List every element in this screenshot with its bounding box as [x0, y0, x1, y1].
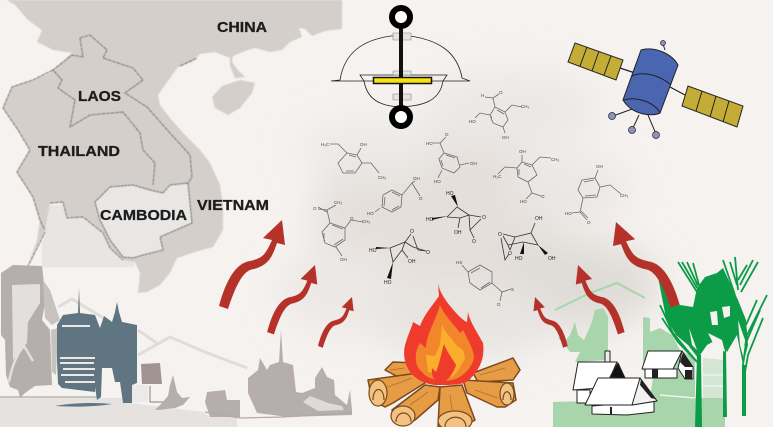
- chamber bowl: [360, 75, 447, 107]
- yellow filter: [374, 78, 432, 84]
- log: front middle: [438, 385, 475, 427]
- right emission arrows: [533, 222, 680, 348]
- right grey towers: [248, 330, 352, 417]
- molecule: levoglucosan lower left: HO: [369, 248, 377, 254]
- central rod: [399, 25, 403, 110]
- dark factory building: [57, 288, 137, 403]
- flux chamber sampler: [331, 8, 470, 126]
- mountain outline: [58, 299, 247, 368]
- molecule: dimethoxyphenol: H₃C: [321, 142, 330, 147]
- molecule: syringaldehyde: O: [499, 90, 503, 95]
- arrow: small right: [533, 297, 568, 348]
- molecule: syringic acid: H₃C: [493, 174, 502, 179]
- molecule: syringaldehyde: OH: [502, 135, 509, 140]
- molecule: syringic acid: CH₃: [551, 157, 559, 162]
- molecule: levoglucosan lower left: [369, 229, 430, 286]
- antenna stalks: [613, 44, 665, 134]
- molecule: levoglucosan lower right: O: [508, 251, 512, 257]
- satellite body: [623, 49, 678, 115]
- low grey building: [205, 390, 240, 417]
- map: land mass: [3, 0, 342, 293]
- tower side strip: [51, 328, 58, 375]
- molecule: levoglucosan lower right: OH: [535, 216, 543, 222]
- molecule: acetovanillone: OH: [340, 257, 347, 262]
- log end rings: [369, 380, 514, 427]
- molecule: acetovanillone: [313, 200, 370, 262]
- molecule: acetovanillone: CH₃: [334, 200, 342, 205]
- log: lower right: [463, 380, 516, 407]
- smoke haze: [280, 70, 660, 360]
- front house: [592, 401, 654, 415]
- left boom: [620, 68, 635, 73]
- small white block: [132, 385, 148, 402]
- right solar panel: [682, 86, 743, 127]
- arrow: large left: [219, 220, 285, 309]
- molecule: syringaldehyde: HO: [469, 119, 476, 124]
- right boom: [670, 87, 685, 95]
- molecule: vanillic acid: HO: [565, 211, 572, 216]
- molecule: levoglucosan lower right: [498, 216, 556, 262]
- tree canopy: [658, 268, 748, 365]
- molecule: levoglucosan lower right: OH: [548, 256, 556, 262]
- satellite: [568, 40, 743, 138]
- body bands: [624, 74, 671, 113]
- ground line: [0, 396, 100, 398]
- molecule: vanillic acid: O: [587, 220, 591, 225]
- bottom ring: [392, 108, 410, 126]
- molecule: syringic acid: OH: [519, 149, 526, 154]
- arrow: small left: [318, 297, 354, 348]
- map label: Cambodia: CAMBODIA: [100, 207, 187, 224]
- arrow: middle left: [267, 265, 317, 334]
- village with green backdrop: [553, 283, 725, 427]
- molecule: bottom benzoate: [456, 260, 514, 307]
- molecule: dimethoxyphenol: CH₃: [378, 175, 386, 180]
- map: country borders: [3, 35, 197, 268]
- small brown building: [141, 363, 162, 384]
- molecule: levoglucosan top: O: [482, 215, 486, 221]
- map label: Vietnam: VIETNAM: [197, 197, 269, 214]
- molecule: levoglucosan lower left: O: [410, 229, 414, 235]
- tree trunks: [695, 350, 746, 427]
- pale ground streaks: [660, 375, 725, 398]
- factory stripes: [60, 326, 95, 382]
- right house: [645, 369, 677, 378]
- logs: [368, 358, 520, 427]
- lower canopy wedges: [689, 320, 745, 360]
- map: Gulf of Thailand: [42, 205, 134, 267]
- molecule: hydroxybenzoic acid: HO: [367, 211, 374, 216]
- green hill: [555, 283, 645, 310]
- molecule: dimethoxyphenol: OH: [360, 142, 367, 147]
- molecule: syringaldehyde: CH₃: [521, 104, 529, 109]
- molecule: levoglucosan top: HO: [446, 191, 454, 197]
- molecule: hydroxybenzoic acid: OH: [413, 176, 420, 181]
- molecule: levoglucosan top: OH: [454, 230, 462, 236]
- molecule: acetovanillone: CH₃: [362, 219, 370, 224]
- tower shoulder: [43, 280, 60, 325]
- map label: Thailand: THAILAND: [38, 143, 120, 160]
- molecule: dimethoxyphenol: [321, 142, 386, 180]
- molecule: syringic acid: HO: [520, 199, 527, 204]
- arrow: large right: [613, 222, 680, 307]
- molecule: dihydroxybenzoic acid: OH: [470, 161, 477, 166]
- arrow: middle right: [576, 265, 625, 334]
- tower curved highlight: [9, 346, 33, 382]
- map label: China: CHINA: [217, 19, 267, 36]
- tree branches: [660, 257, 767, 378]
- left house: [573, 351, 693, 415]
- molecule: levoglucosan lower left: O: [426, 250, 430, 256]
- chamber dome: [331, 35, 470, 81]
- map: Hainan island: [212, 80, 255, 115]
- log: back right: [473, 358, 520, 382]
- molecule: dihydroxybenzoic acid: HO: [434, 179, 441, 184]
- molecule: syringaldehyde: [469, 90, 529, 140]
- molecule: acetovanillone: O: [313, 206, 317, 211]
- molecule: acetovanillone: O: [350, 216, 354, 221]
- factory base shadow: [55, 403, 112, 407]
- green skyline right: [643, 317, 695, 398]
- urban and industrial skyline: [0, 265, 360, 427]
- molecule: hydroxybenzoic acid: O: [419, 196, 423, 201]
- molecule: dihydroxybenzoic acid: HO: [426, 141, 433, 146]
- map label: Laos: LAOS: [78, 88, 121, 105]
- left solar panel: [568, 43, 623, 80]
- molecule: levoglucosan top: HO: [426, 217, 434, 223]
- grey tower group: [1, 265, 56, 398]
- molecule: dihydroxybenzoic acid: O: [445, 132, 449, 137]
- map: Cambodia: [95, 183, 192, 258]
- white canopy gaps: [710, 306, 730, 325]
- molecule: syringic acid: O: [541, 194, 545, 199]
- molecule: levoglucosan top: [426, 191, 486, 245]
- green skyline left: [557, 308, 608, 362]
- log: lower left: [368, 373, 425, 407]
- tower highlight: [12, 284, 40, 360]
- pale skyline fade: [703, 358, 725, 398]
- flame core: [432, 344, 456, 383]
- map: mainland Southeast Asia: [3, 0, 342, 293]
- rising emission arrows: [219, 220, 354, 348]
- molecule: syringic acid: [493, 149, 559, 204]
- molecule: levoglucosan lower right: O: [498, 232, 502, 238]
- molecule: vanillic acid: CH₃: [620, 193, 628, 198]
- molecule: bottom benzoate: HS: [456, 260, 462, 265]
- antenna tips: [608, 40, 666, 138]
- log: front left: [392, 385, 440, 425]
- molecule: levoglucosan lower left: OH: [408, 259, 416, 265]
- molecule: levoglucosan lower left: HO: [384, 280, 392, 286]
- log: back left: [385, 362, 426, 378]
- molecule: hydroxybenzoic acid: [367, 176, 423, 216]
- molecule: levoglucosan top: O: [472, 239, 476, 245]
- flame yellow: [426, 324, 465, 377]
- green trees: [658, 257, 767, 427]
- molecule: vanillic acid: OH: [596, 164, 603, 169]
- white foreground cut-outs: [238, 419, 360, 427]
- campfire: [368, 282, 520, 427]
- ground line right: [205, 412, 352, 418]
- molecule: syringaldehyde: H: [481, 93, 484, 98]
- ground: [0, 398, 237, 427]
- spire rubble: [155, 375, 190, 410]
- green ground: [553, 398, 725, 427]
- block outline: [150, 386, 168, 402]
- clamps: [393, 33, 411, 100]
- flame outer: [404, 282, 483, 385]
- house dark details: [610, 352, 693, 414]
- top ring: [392, 8, 410, 26]
- tower light patches: [303, 396, 344, 411]
- molecule: dihydroxybenzoic acid: [426, 132, 477, 184]
- molecule: bottom benzoate: S: [511, 287, 514, 292]
- molecule: bottom benzoate: O: [497, 302, 501, 307]
- molecule: levoglucosan lower right: HO: [515, 256, 523, 262]
- molecule: vanillic acid: [565, 164, 628, 225]
- flame middle: [416, 305, 474, 381]
- log grain: [385, 368, 505, 410]
